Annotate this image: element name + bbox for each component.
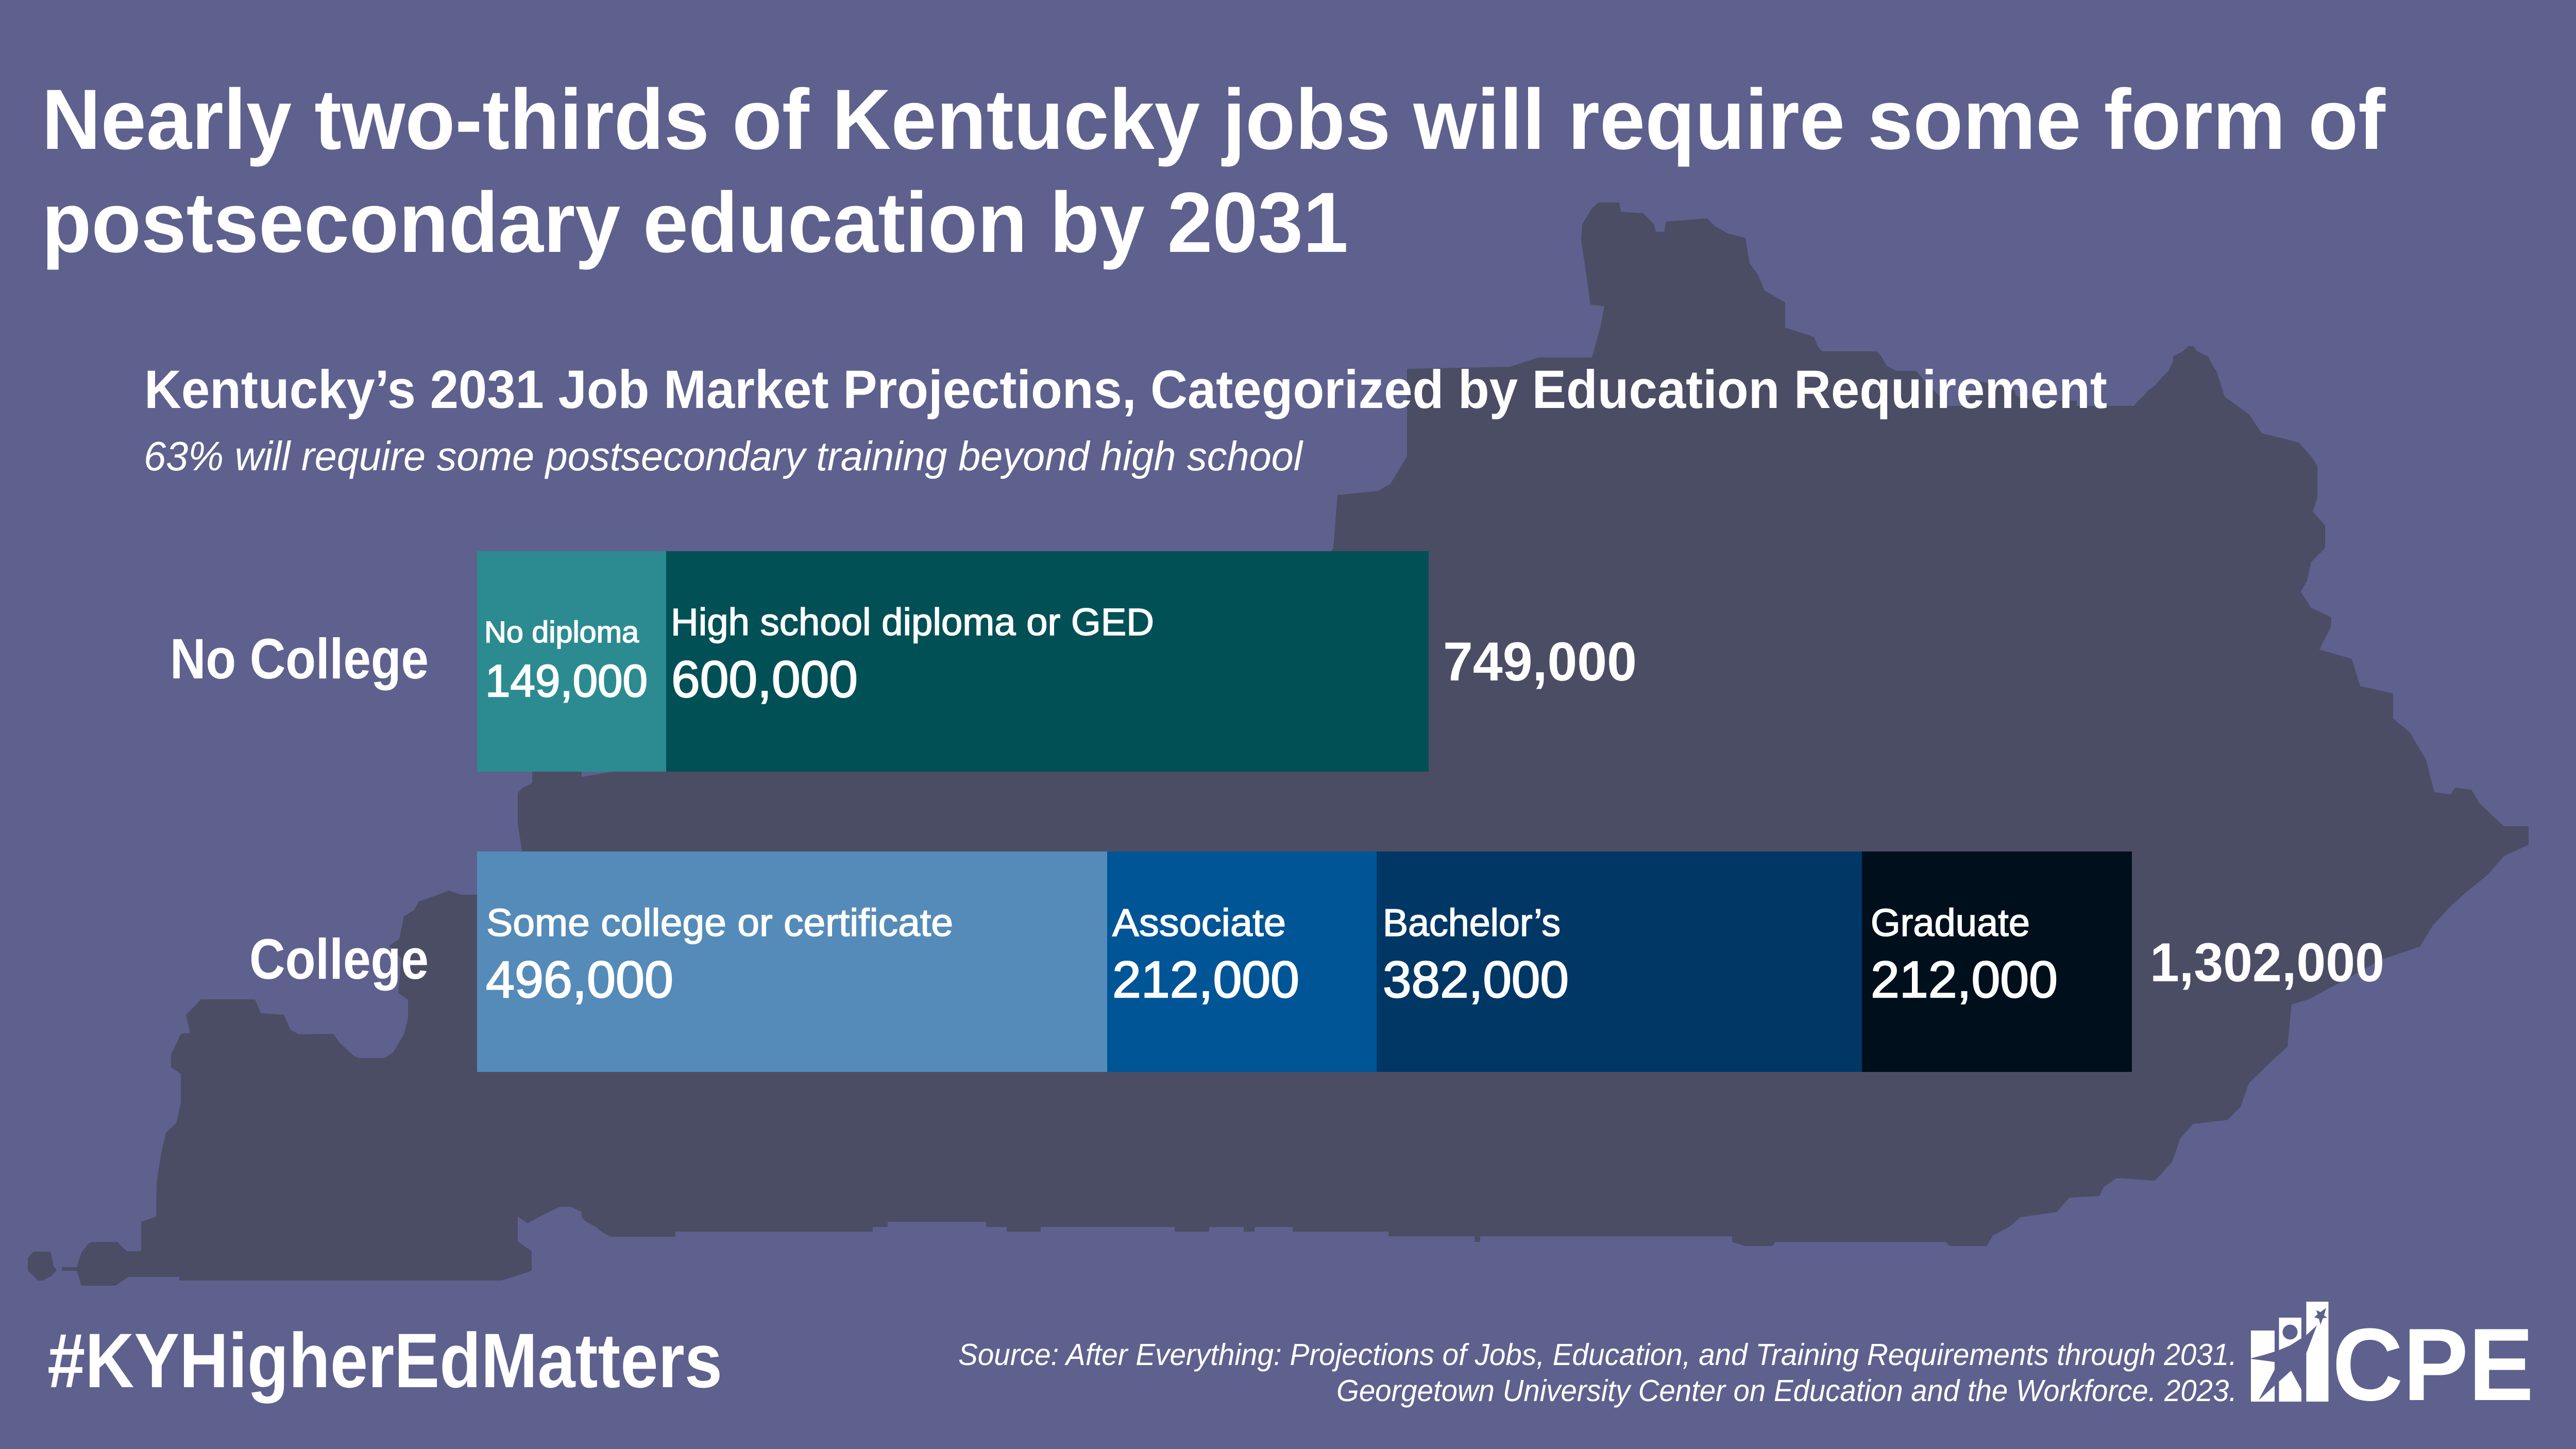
- total: No College: 749,000: [1443, 630, 1637, 692]
- segment: Bachelor's: 382,000: [1383, 951, 1569, 1009]
- bar: No College: [477, 551, 1429, 772]
- segment: Associate: Associate: [1112, 901, 1286, 944]
- segment: Some college or certificate: [477, 851, 1108, 1072]
- source note: [958, 1338, 2237, 1408]
- segment: Bachelor's: [1377, 851, 1862, 1072]
- segment: High school diploma or GED: High school diploma or GED: [671, 601, 1154, 643]
- segment: Some college or certificate: Some college or certificate: [486, 901, 953, 944]
- logo wordmark: CPE: [2332, 1307, 2534, 1422]
- row label: No College: No College: [170, 627, 429, 691]
- segment: Associate: [1107, 851, 1377, 1072]
- segment: High school diploma or GED: 600,000: [671, 651, 858, 708]
- chart subheading: 63% will require some postsecondary training beyond high school: [144, 433, 1303, 479]
- chart heading: Kentucky’s 2031 Job Market Projections, Categorized by Education Requirement: [144, 360, 2107, 420]
- segment: Graduate: 212,000: [1871, 951, 2058, 1009]
- icon: bars with star figure: [2251, 1302, 2329, 1402]
- hashtag: #KYHigherEdMatters: [47, 1317, 722, 1404]
- segment: Some college or certificate: 496,000: [486, 951, 673, 1009]
- title: [42, 72, 2386, 270]
- segment: No diploma: [477, 551, 667, 772]
- row label: College: College: [249, 928, 429, 991]
- segment: High school diploma or GED: [666, 551, 1429, 772]
- source note: Georgetown University Center on Education and the Workforce. 2023.: [1336, 1374, 2237, 1408]
- segment: Associate: 212,000: [1112, 951, 1299, 1009]
- logo: CPE: [2251, 1302, 2534, 1422]
- source note: Source: After Everything: Projections of Jobs, Education, and Training Requirements through 2031.: [958, 1338, 2237, 1372]
- map: Kentucky silhouette: [28, 202, 2529, 1286]
- total: College: 1,302,000: [2150, 931, 2384, 993]
- title: postsecondary education by 2031: [42, 175, 1348, 270]
- segment: Bachelor's: Bachelor’s: [1383, 901, 1561, 944]
- segment: Graduate: [1862, 851, 2132, 1072]
- segment: No diploma: 149,000: [485, 655, 648, 706]
- segment: Graduate: Graduate: [1871, 901, 2030, 944]
- title: Nearly two-thirds of Kentucky jobs will require some form of: [42, 72, 2386, 167]
- segment: No diploma: No diploma: [484, 616, 639, 649]
- bar: College: [477, 851, 2132, 1072]
